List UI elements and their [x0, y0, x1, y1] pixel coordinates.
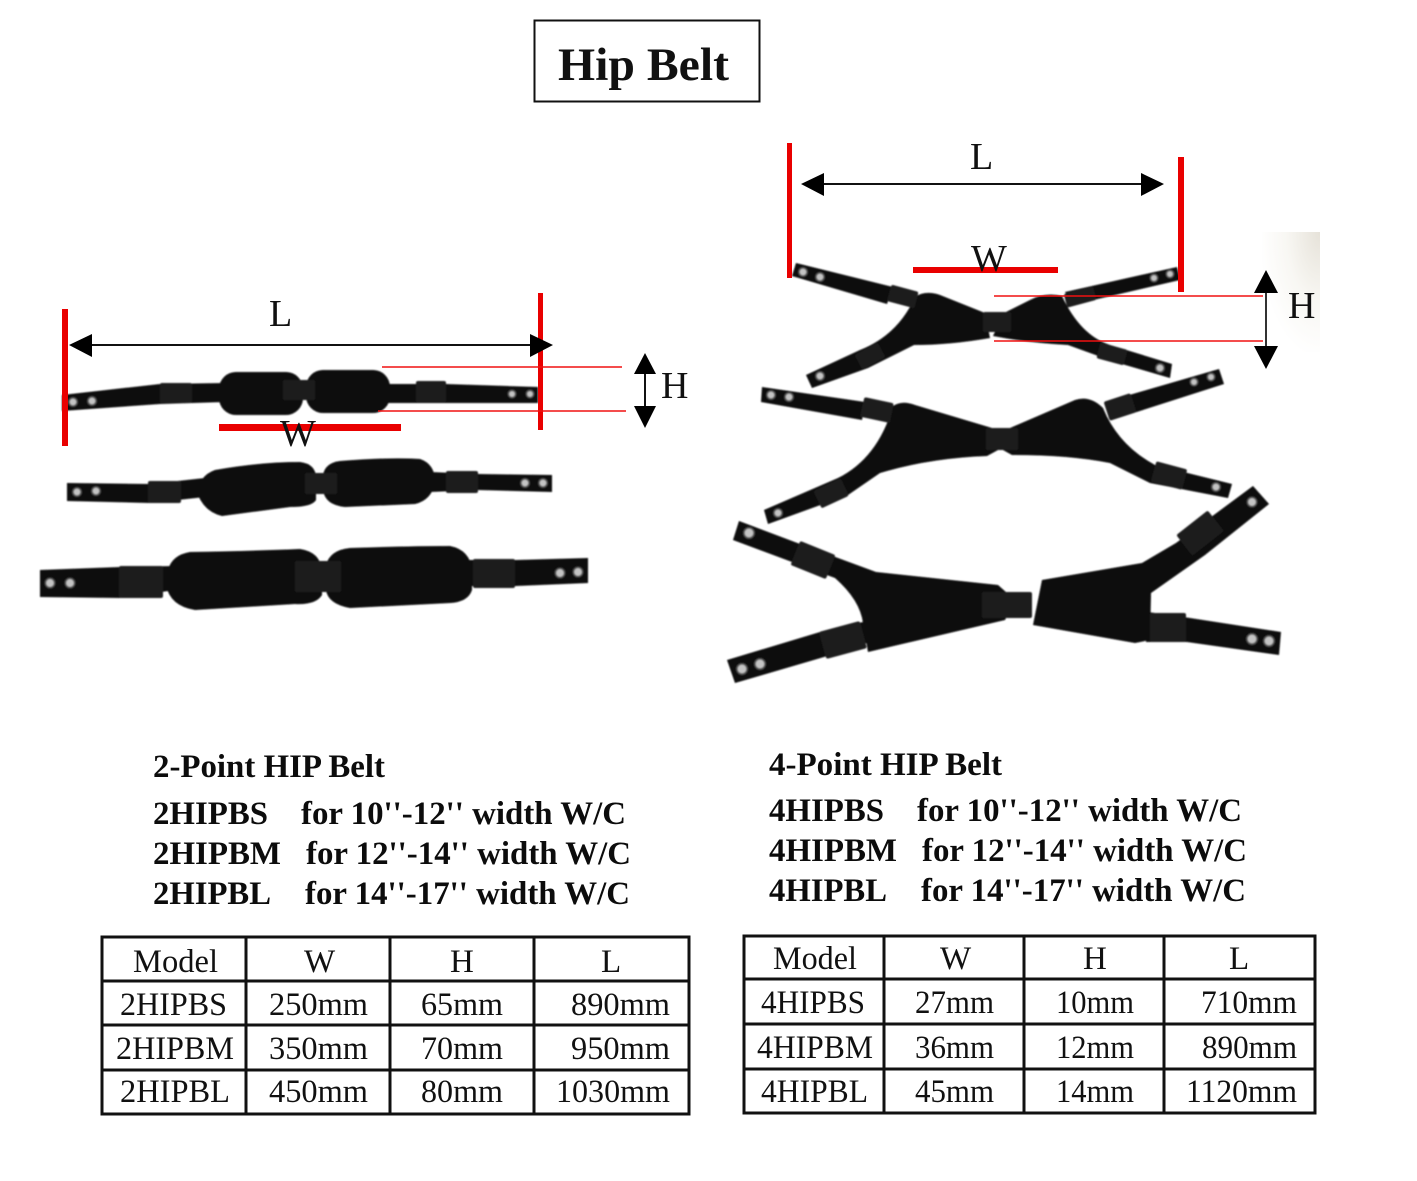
table: 2-point sizes: 2HIPBS — [120, 987, 227, 1023]
background tint behind 4-point photo — [1262, 232, 1320, 352]
belt: 4HIPBS small — [792, 263, 1180, 388]
text block: 4-point belt models: 4HIPBS — [769, 793, 884, 829]
text block: 4-point belt models: 4HIPBM — [769, 833, 897, 869]
table: 2-point sizes: 950mm — [571, 1031, 670, 1067]
text block: 2-point belt models: 2HIPBL — [153, 876, 271, 912]
text block: 4-point belt models: 4-Point HIP Belt — [769, 747, 1002, 783]
table: 2-point sizes: 250mm — [269, 987, 368, 1023]
table: 2-point sizes: 2HIPBL — [120, 1074, 230, 1110]
table: 4-point sizes: 4HIPBS — [761, 985, 865, 1021]
L label: L — [970, 136, 993, 178]
W bar — [913, 267, 1058, 273]
table: 2-point sizes: L — [601, 944, 621, 980]
H guide lines — [994, 296, 1263, 341]
table: 2-point sizes: W — [304, 944, 336, 980]
table: 4-point sizes: L — [1229, 941, 1249, 977]
L limit lines — [62, 293, 543, 446]
W label: W — [971, 238, 1007, 280]
text block: 4-point belt models — [769, 747, 1247, 909]
text block: 2-point belt models: 2-Point HIP Belt — [153, 749, 385, 785]
table: 4-point sizes: 12mm — [1056, 1030, 1134, 1066]
W bar — [219, 424, 401, 431]
H arrow — [634, 353, 656, 428]
title box — [534, 20, 760, 102]
text block: 2-point belt models: for 12''-14'' width W/C — [306, 836, 631, 872]
belt: 4HIPBM medium — [761, 369, 1232, 524]
table: 2-point sizes: 70mm — [421, 1031, 503, 1067]
table: 2-point sizes: H — [450, 944, 474, 980]
table: 4-point sizes: 10mm — [1056, 985, 1134, 1021]
text block: 2-point belt models: for 14''-17'' width W/C — [305, 876, 630, 912]
table: 4-point sizes: 14mm — [1056, 1074, 1134, 1110]
L arrow — [801, 173, 1164, 196]
table: 2-point sizes: 80mm — [421, 1074, 503, 1110]
belt: 4HIPBL large — [727, 486, 1281, 683]
table: 4-point sizes: 4HIPBM — [757, 1030, 873, 1066]
H label: H — [661, 365, 688, 407]
table: 4-point sizes: 27mm — [915, 985, 994, 1021]
photo: 4-point belts — [727, 263, 1281, 683]
table: 2-point sizes: 350mm — [269, 1031, 368, 1067]
belt: 2HIPBM medium — [67, 458, 552, 516]
text block: 4-point belt models: 4HIPBL — [769, 873, 887, 909]
table: 4-point sizes: H — [1083, 941, 1107, 977]
text block: 4-point belt models: for 10''-12'' width W/C — [917, 793, 1242, 829]
table: 4-point sizes: 4HIPBL — [761, 1074, 868, 1110]
text block: 4-point belt models: for 12''-14'' width W/C — [922, 833, 1247, 869]
L limit lines — [787, 143, 1184, 292]
text block: 2-point belt models: 2HIPBS — [153, 796, 268, 832]
table: 4-point sizes: 1120mm — [1186, 1074, 1297, 1110]
table: 2-point sizes: 2HIPBM — [116, 1031, 234, 1067]
table: 2-point sizes: 65mm — [421, 987, 503, 1023]
H label: H — [1288, 285, 1315, 327]
table: 4-point sizes: Model — [773, 941, 857, 977]
text block: 4-point belt models: for 14''-17'' width W/C — [921, 873, 1246, 909]
text block: 2-point belt models: for 10''-12'' width W/C — [301, 796, 626, 832]
table: 2-point sizes: 1030mm — [556, 1074, 670, 1110]
table: 2-point sizes: 890mm — [571, 987, 670, 1023]
text block: 2-point belt models: 2HIPBM — [153, 836, 281, 872]
table: 2-point sizes: Model — [133, 944, 218, 980]
table: 4-point sizes: 710mm — [1201, 985, 1297, 1021]
L arrow — [69, 334, 553, 357]
table: 4-point sizes: W — [940, 941, 972, 977]
dimension markers: 2-point belt — [62, 293, 688, 455]
table: 4-point sizes: 890mm — [1202, 1030, 1297, 1066]
H arrow — [1254, 270, 1278, 369]
title box: Hip Belt — [558, 39, 729, 91]
table: 4-point sizes — [744, 936, 1315, 1113]
table: 4-point sizes: 45mm — [915, 1074, 994, 1110]
belt: 2HIPBS small — [62, 370, 538, 415]
photo: 2-point belts — [40, 370, 588, 610]
table: 4-point sizes: 36mm — [915, 1030, 994, 1066]
table: 2-point sizes: 450mm — [269, 1074, 368, 1110]
dimension markers: 4-point belt — [787, 136, 1315, 369]
text block: 2-point belt models — [153, 749, 631, 912]
table: 2-point sizes — [102, 937, 689, 1114]
H guide lines — [378, 367, 626, 411]
L label: L — [269, 293, 292, 335]
W label: W — [280, 413, 316, 455]
belt: 2HIPBL large — [40, 546, 588, 610]
